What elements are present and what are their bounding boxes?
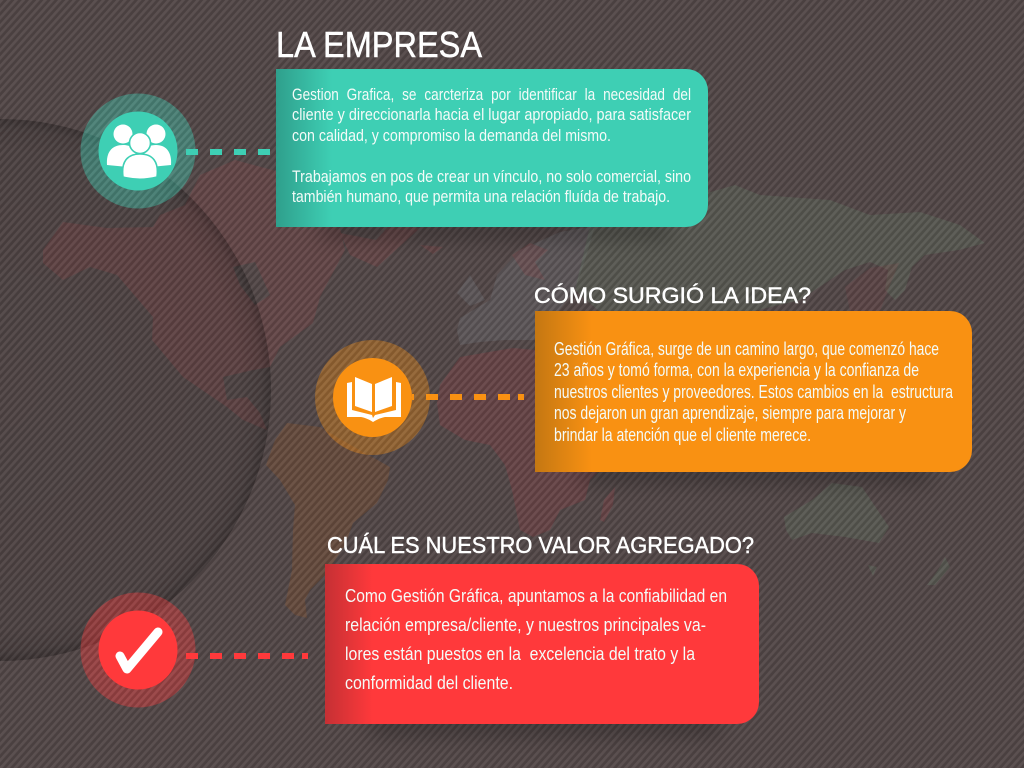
card text: Trabajamos en pos de crear un vínculo, no solo comercial, sino [292, 168, 691, 186]
map: Greenland and Iceland [340, 225, 443, 267]
card [325, 564, 759, 724]
map: Madagascar [600, 487, 615, 522]
icon rings [80, 94, 430, 708]
map: Africa [437, 348, 625, 537]
map: New Zealand [927, 557, 950, 585]
card text [554, 339, 954, 445]
card text: lores están puestos en la excelencia del trato y la [345, 644, 696, 664]
icon: check mark [98, 610, 178, 690]
heading: CÓMO SURGIÓ LA IDEA? [534, 283, 811, 308]
section: Cómo surgió la idea [333, 283, 972, 472]
card text: con calidad, y compromiso la demanda del mismo. [292, 127, 611, 145]
large shadow disc [0, 119, 271, 661]
heading: LA EMPRESA [276, 24, 482, 65]
map: South Asia [845, 263, 899, 311]
map: North America [43, 160, 345, 430]
card text: relación empresa/cliente, y nuestros principales va- [345, 615, 706, 635]
connector [186, 149, 270, 155]
map: Asia [575, 185, 985, 312]
card text: Como Gestión Gráfica, apuntamos a la confiabilidad en [345, 586, 727, 606]
connector [412, 394, 524, 400]
heading: CUÁL ES NUESTRO VALOR AGREGADO? [327, 532, 754, 558]
card text: cliente y direccionarla hacia el lugar apropiado, para satisfacer [292, 106, 691, 124]
section: Cuál es nuestro valor agregado [98, 532, 759, 724]
card text: nos dejaron un gran aprendizaje, siempre para mejorar y [554, 403, 906, 423]
card text: también humano, que permita una relación fluída de trabajo. [292, 188, 670, 206]
card text: conformidad del cliente. [345, 673, 513, 693]
icon: open book [333, 358, 412, 437]
map: South America [266, 423, 390, 618]
card text [292, 86, 691, 206]
icon: people [98, 112, 178, 190]
card text: Gestion Grafica, se carcteriza por identificar la necesidad del [292, 86, 691, 104]
section: La Empresa [98, 24, 708, 227]
card text: 23 años y tomó forma, con la experiencia y la confianza de [554, 360, 919, 380]
card [276, 69, 708, 227]
card text: brindar la atención que el cliente merece. [554, 425, 811, 445]
map: Europe [457, 226, 595, 345]
map: Australia [784, 483, 889, 576]
card [535, 311, 972, 472]
card shadows [320, 222, 930, 734]
card text [345, 586, 727, 693]
connector [186, 653, 308, 659]
map: Middle East [512, 243, 548, 280]
world map [43, 160, 985, 618]
